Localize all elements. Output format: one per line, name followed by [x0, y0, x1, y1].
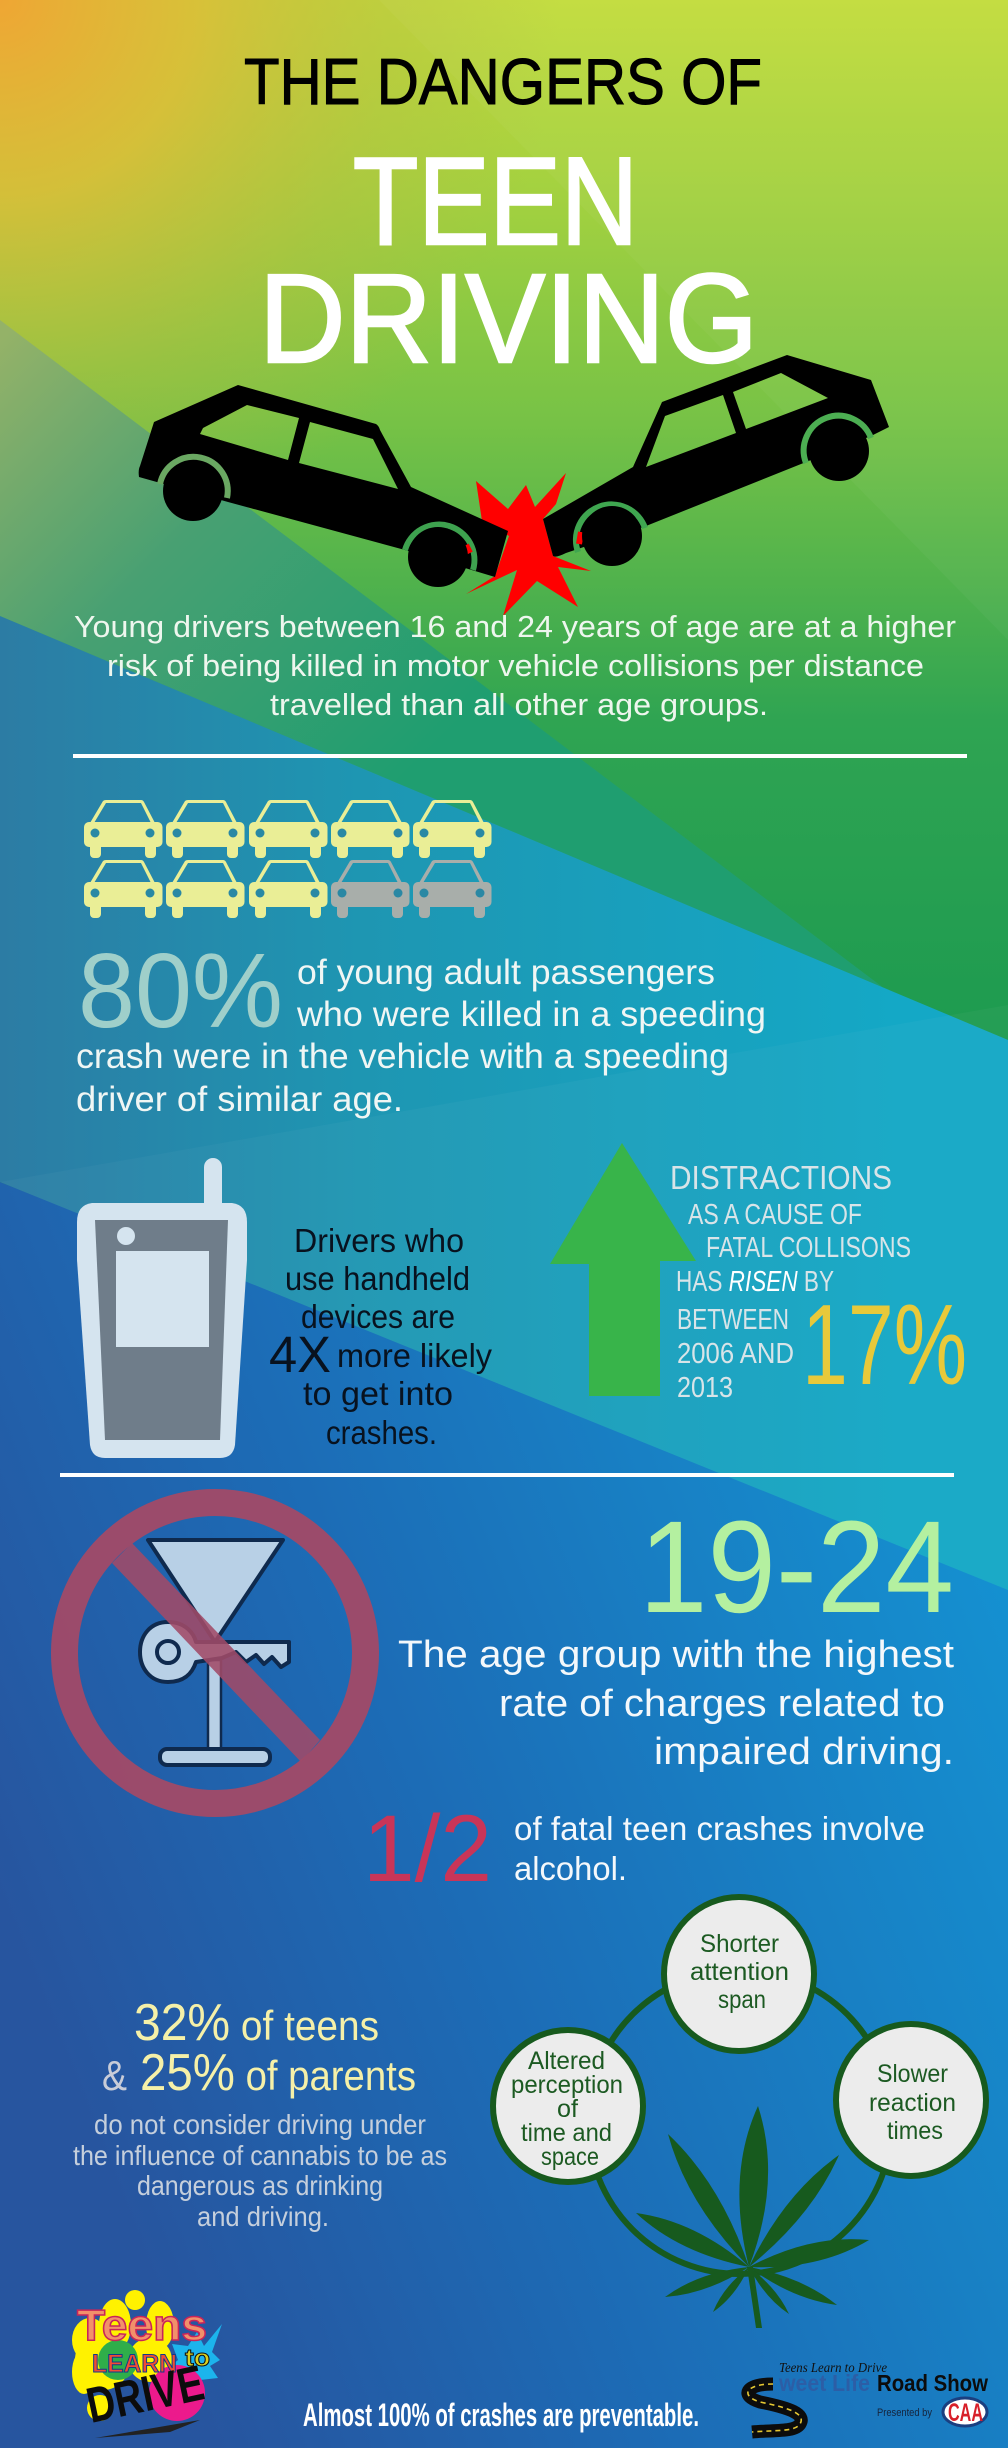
text block: fatal crashes: alcohol.	[514, 1850, 627, 1887]
logo text: teens learn to drive: Teens Learn to Drive	[779, 2361, 887, 2376]
title	[244, 45, 762, 389]
icon: road S	[748, 2384, 801, 2432]
text block: do not consider: do not consider driving under	[94, 2109, 426, 2140]
logo text: sweet life: weet Life	[778, 2370, 870, 2396]
stat: 32 percent of teens: 32% of teens	[134, 1994, 379, 2052]
text block: handheld devices: devices are	[301, 1298, 455, 1335]
text block: distractions: AS A CAUSE OF	[688, 1199, 862, 1231]
illustration: two cars colliding	[139, 355, 889, 616]
text block: distractions: BETWEEN	[677, 1304, 789, 1336]
logo text: presented by: Presented by	[877, 2407, 932, 2419]
text block: passengers: driver of similar age.	[76, 1080, 403, 1119]
logo: sweet life road show	[748, 2361, 988, 2432]
text block: passengers: crash were in the vehicle with a speeding	[76, 1037, 729, 1076]
logo text: drive: DRIVE	[82, 2354, 209, 2434]
text block: handheld devices: to get into	[303, 1375, 453, 1412]
text block: passengers: of young adult passengers	[297, 953, 715, 992]
circle: altered perception: Altered	[528, 2047, 605, 2075]
circle: shorter attention span	[664, 1897, 814, 2051]
logo: teens learn to drive	[72, 2290, 222, 2438]
circle: altered perception: of	[557, 2095, 578, 2123]
text block: age group: rate of charges related to	[499, 1683, 945, 1725]
circle: altered perception: perception	[511, 2071, 623, 2099]
circle: altered perception: space	[541, 2143, 599, 2171]
big number: 19-24: 19-24	[639, 1493, 954, 1640]
stat: 25 percent of parents: 25% of parents	[140, 2044, 416, 2102]
circle: slower reaction times	[836, 2024, 986, 2176]
text block: handheld devices	[269, 1222, 492, 1451]
text block: passengers	[76, 953, 766, 1119]
circle: shorter attention span: span	[718, 1986, 766, 2014]
text block: intro: Young drivers between 16 and 24 years of age are at a higher	[74, 609, 956, 644]
heading: teen: TEEN	[353, 133, 638, 271]
stat: one half	[363, 1796, 925, 1902]
icon: no drinking and driving	[64, 1502, 366, 1804]
splatter shapes	[72, 2290, 174, 2421]
text block: intro: risk of being killed in motor vehicle collisions per distance	[107, 648, 924, 683]
text block: age group: impaired driving.	[654, 1731, 954, 1773]
circle: altered perception: time and	[521, 2119, 612, 2147]
arrow: green up arrow	[550, 1143, 696, 1396]
circle: shorter attention span: attention	[690, 1958, 789, 1986]
icon: glass and key	[140, 1540, 289, 1765]
text block: age group: The age group with the highest	[398, 1634, 954, 1676]
pictogram: 8 of 10 cars	[84, 800, 492, 918]
icon: cannabis leaf	[636, 2106, 869, 2328]
text block: handheld devices: Drivers who	[294, 1222, 464, 1259]
text block: distractions: FATAL COLLISONS	[706, 1232, 911, 1264]
text block: handheld devices: use handheld	[285, 1260, 470, 1297]
big number: 80%: 80%	[78, 932, 283, 1050]
text block: age group	[398, 1634, 954, 1773]
scratch mark	[95, 2420, 200, 2438]
connecting ring	[588, 1970, 892, 2274]
icon: mobile phone	[77, 1158, 247, 1458]
text block: do not consider: dangerous as drinking	[137, 2170, 383, 2201]
circle: altered perception	[493, 2030, 643, 2182]
circle: slower reaction times: Slower	[877, 2060, 948, 2088]
text block: do not consider: and driving.	[197, 2201, 329, 2232]
icon: prohibition ring	[64, 1502, 366, 1804]
logo text: to: to	[185, 2345, 210, 2372]
text block: fatal crashes	[514, 1810, 925, 1887]
text block: passengers: who were killed in a speeding	[296, 995, 766, 1034]
text block: distractions: HAS RISEN BY	[676, 1266, 834, 1298]
big number: 1/2: 1/2	[363, 1796, 492, 1902]
logo text: teens: Teens	[77, 2301, 207, 2350]
icon: right car	[543, 355, 889, 566]
circle: slower reaction times: reaction	[869, 2089, 956, 2117]
text block: distractions: 2006 AND	[677, 1338, 794, 1370]
icon: left car	[139, 385, 508, 587]
stat: 19-24	[398, 1493, 954, 1773]
logo text: road show: Road Show	[877, 2370, 988, 2396]
text block: distractions: DISTRACTIONS	[670, 1159, 892, 1196]
icon: red crash star	[466, 473, 591, 616]
text block: handheld devices: crashes.	[326, 1414, 437, 1451]
logo text: learn: LEARN	[92, 2350, 177, 2378]
footer text: Almost 100% of crashes are preventable.	[303, 2397, 699, 2433]
diagram: cannabis effects	[493, 1897, 986, 2328]
circle: slower reaction times: times	[887, 2117, 943, 2145]
text block: cannabis attitudes	[73, 1994, 447, 2232]
heading: driving: DRIVING	[259, 248, 758, 389]
logo: CAA	[943, 2398, 987, 2427]
text block: distractions	[670, 1159, 911, 1404]
stat: 25 percent of parents: &	[102, 2052, 127, 2099]
logo: CAA: CAA	[948, 2399, 983, 2427]
text block: do not consider: the influence of cannabis to be as	[73, 2140, 447, 2171]
text block: intro	[74, 609, 956, 722]
heading: the dangers of: THE DANGERS OF	[244, 45, 762, 118]
text block: fatal crashes: of fatal teen crashes involve	[514, 1810, 925, 1847]
text block: handheld devices: more likely	[337, 1337, 492, 1374]
big number: 4X: 4X	[269, 1326, 331, 1383]
text block: do not consider	[73, 2109, 447, 2232]
stat: 80 percent	[76, 932, 766, 1119]
circle: shorter attention span: Shorter	[700, 1930, 779, 1958]
text block: intro: travelled than all other age groups.	[270, 687, 768, 722]
text block: distractions: 2013	[677, 1372, 733, 1404]
